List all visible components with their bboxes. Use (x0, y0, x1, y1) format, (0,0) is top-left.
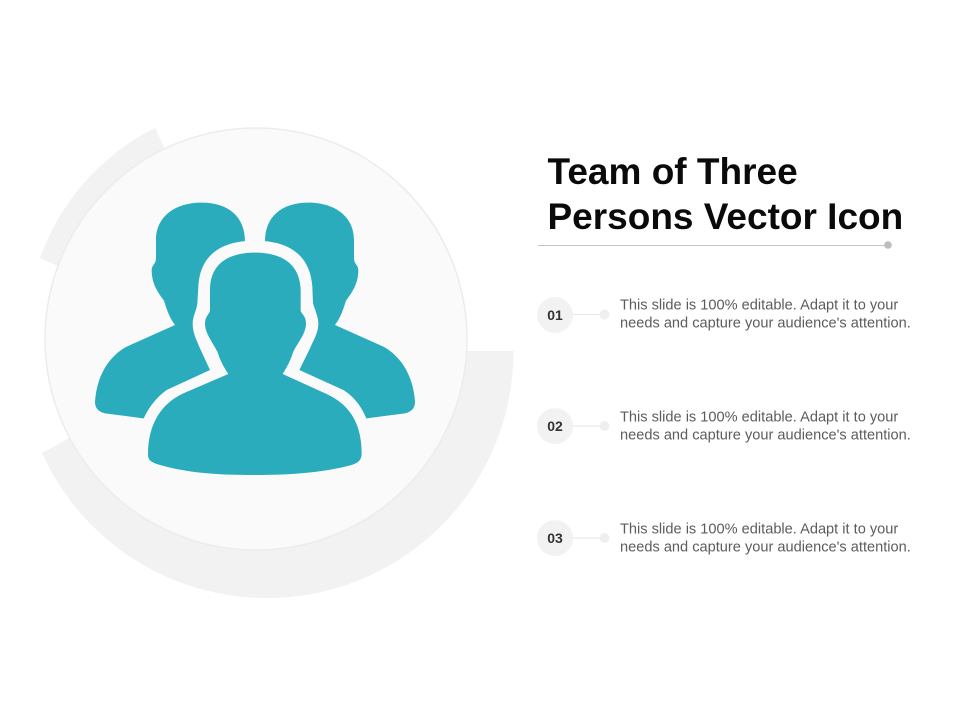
main circle (45, 128, 467, 550)
description 01: This slide is 100% editable. Adapt it to your (620, 298, 898, 314)
icon: team of three persons (95, 203, 415, 483)
list item 03 (537, 520, 911, 556)
icon: front person (148, 253, 362, 475)
title: Persons Vector Icon (548, 196, 903, 237)
decorative arc: top left (40, 128, 170, 276)
connector 03 (573, 537, 604, 539)
description 01: needs and capture your audience's attention. (620, 316, 911, 332)
decorative arc: bottom right (42, 351, 514, 598)
number badge 02 (537, 408, 573, 444)
connector 01 (573, 314, 604, 316)
panel: circular icon badge (40, 128, 514, 598)
title: Team of Three (548, 151, 798, 192)
connector 02 (573, 425, 604, 427)
list item 02 (537, 408, 911, 444)
title divider with end dot (538, 241, 892, 249)
description 03: This slide is 100% editable. Adapt it to your (620, 522, 898, 538)
list item 01 (537, 297, 911, 333)
description 03: needs and capture your audience's attention. (620, 540, 911, 556)
number badge 03 (537, 520, 573, 556)
icon: back left person (95, 203, 247, 423)
number badge 01 (537, 297, 573, 333)
list item 03: 03 (547, 530, 563, 546)
icon: back right person (263, 203, 415, 423)
description 02: needs and capture your audience's attention. (620, 428, 911, 444)
description 02: This slide is 100% editable. Adapt it to your (620, 410, 898, 426)
list item 02: 02 (547, 418, 563, 434)
icon: halo around front person (137, 241, 375, 483)
list item 01: 01 (547, 307, 563, 323)
